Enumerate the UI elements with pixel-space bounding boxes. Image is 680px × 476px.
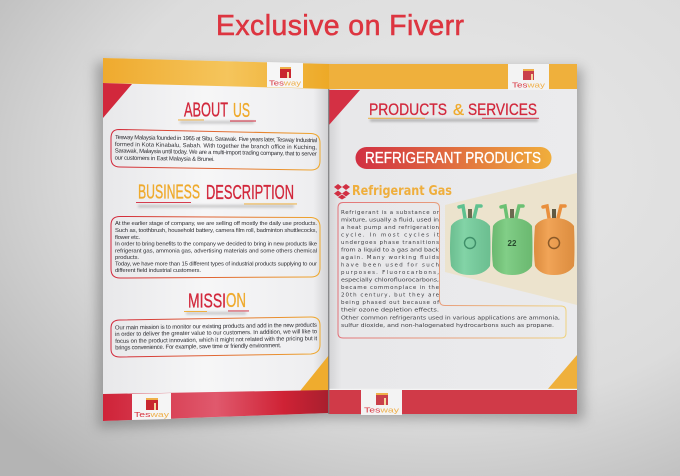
text box: business description: Such as, toothbrush, household battery, camera film roll, badminton shuttlecocks, [115, 228, 317, 234]
logo: right page bottom [361, 389, 402, 415]
text box: business description: In order to bring benefits to the company we decided to bring in new products like [115, 242, 318, 248]
text box: mission: Our main mission is to monitor our existing products and add in the new products [115, 323, 317, 331]
heading: about us: US [233, 100, 250, 122]
book spine [328, 89, 329, 414]
text box: business description: refrigerant gas, ammonia gas, advertising materials and some others chemical [115, 248, 317, 254]
text box: refrigerant description: undergoes phase transitions [341, 240, 439, 246]
text box: business description: At the earlier stage of company, we are selling off mostly the daily use products. [115, 221, 317, 227]
text box: refrigerant description: Other common refrigerants used in various applications are ammonia, [341, 316, 560, 322]
heading: mission: MISSI [188, 290, 226, 312]
text box: refrigerant description: a heat pump and refrigeration [341, 225, 440, 231]
heading: refrigerant gas: Refrigerant Gas [352, 184, 452, 199]
text box: refrigerant description: purposes. Fluorocarbons, [341, 270, 439, 276]
logo: right page top: Tes way [512, 82, 546, 90]
icon: dropbox boxes [334, 184, 350, 200]
text box: refrigerant description: cycle. In most cycles it [341, 232, 440, 238]
heading: products and services: PRODUCTS [369, 100, 447, 119]
heading: business description: BUSINESS [138, 182, 200, 204]
banner: refrigerant products [356, 147, 552, 169]
logo: left page bottom: Tes way [134, 410, 169, 419]
right page red corner triangle [329, 90, 360, 125]
text box: refrigerant description: especially chlorofluorocarbons, [341, 278, 439, 284]
text box: refrigerant description: being phased out because of [341, 300, 440, 306]
panel: right page [329, 64, 577, 415]
text box: refrigerant description: Refrigerant is a substance or [341, 210, 440, 216]
left page bottom red band [103, 390, 329, 421]
text box: about us: Sarawak, Malaysia until today. We are a multi-import trading company, that to server [115, 148, 317, 158]
left page red corner triangle [103, 83, 132, 118]
heading: products and services [368, 100, 539, 122]
logo: right page top [508, 64, 549, 90]
title: Exclusive on Fiverr [216, 10, 464, 42]
text box: about us: Tesway Malaysia founded in 1965 at Sibu, Sarawak. Five years later, Tesway Industrial [115, 135, 317, 144]
text box: refrigerant description: from a liquid to a gas and back [341, 248, 440, 254]
logo: right page bottom: Tes way [364, 406, 399, 414]
text box: about us: our customers in East Malaysia & Brunei. [115, 155, 215, 163]
text box: business description: products. [115, 255, 139, 261]
text box: about us: formed in Kota Kinabalu, Sabah. With together the branch office in Kuching, [115, 142, 317, 151]
text box: refrigerant description: mixture, usually a fluid, used in [341, 218, 440, 224]
logo: left page bottom [132, 393, 171, 420]
banner: refrigerant products: REFRIGERANT PRODUCTS [365, 150, 541, 167]
panel: left page [103, 58, 329, 421]
light green cylinder labelled 22: 22 [508, 239, 517, 248]
text box: business description [111, 216, 320, 278]
green cylinder [450, 206, 490, 275]
text box: business description: flower etc. [115, 235, 140, 241]
text box: business description: Today, we have more than 15 different types of industrial products supplying to our [115, 262, 317, 268]
text box: refrigerant description: 20th century, but they are [341, 292, 440, 298]
product photo: refrigerant cylinders [450, 206, 574, 275]
text box: mission: in order to deliver the greater value to our customers. In addition, we will like to [115, 329, 318, 338]
beige product backdrop [445, 173, 577, 305]
text box: refrigerant description: again. Many working fluids [341, 255, 439, 261]
right page yellow corner triangle [547, 355, 577, 390]
heading: business description [136, 182, 297, 208]
text box: mission: brings convenience. For example, save time or friendly environment. [115, 343, 282, 351]
text box: refrigerant description: became commonplace in the [341, 285, 440, 291]
text box: about us [111, 130, 320, 170]
orange cylinder [534, 206, 574, 275]
heading: products and services: & [453, 102, 464, 119]
text box: refrigerant description: their ozone depletion effects. [341, 308, 439, 314]
brochure shadow [96, 62, 584, 428]
text box: refrigerant description [338, 202, 566, 338]
right page bottom red band [329, 390, 577, 414]
left page top yellow band [103, 58, 329, 89]
heading: about us: ABOUT [184, 100, 228, 122]
right page top yellow band [329, 64, 577, 89]
logo: left page top: Tes way [269, 80, 302, 88]
text box: mission [111, 317, 320, 357]
left page yellow corner triangle [300, 355, 329, 391]
text box: refrigerant description: have been used for such [341, 262, 440, 268]
heading: products and services: SERVICES [468, 100, 537, 119]
heading: business description: DESCRIPTION [206, 182, 294, 204]
text box: business description: different field industrial customers. [115, 268, 201, 274]
heading: mission: ON [226, 290, 246, 312]
logo: left page top [267, 62, 303, 88]
text box: refrigerant description: sulfur dioxide, and non-halogenated hydrocarbons such as propane. [341, 323, 554, 329]
text box: mission: focus on the product innovation, which it might not related with the pricing but it [115, 336, 318, 345]
